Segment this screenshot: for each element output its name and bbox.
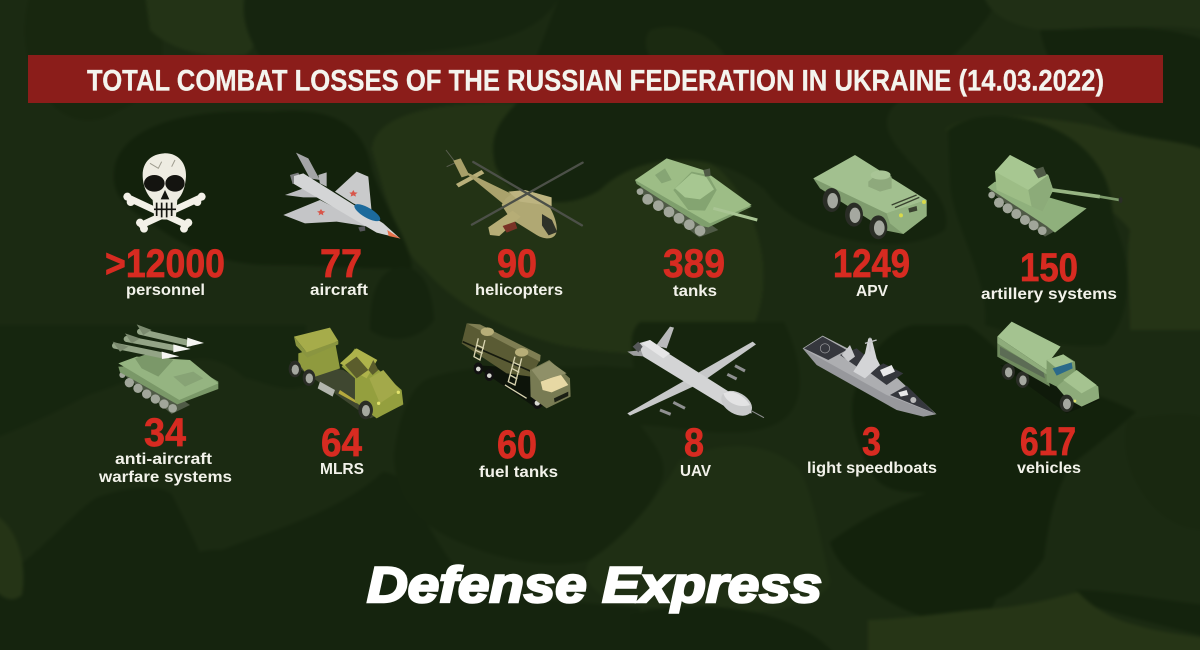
icon: fuel tanker truck	[462, 323, 572, 409]
item: MLRS	[289, 328, 403, 478]
icon: self-propelled howitzer	[988, 155, 1123, 237]
title banner	[28, 55, 1163, 103]
value: 34: 34	[144, 411, 187, 455]
item: light speedboats	[803, 336, 937, 477]
value: 389: 389	[663, 242, 725, 286]
label: anti-aircraft warfare systems	[98, 451, 232, 486]
label: light speedboats: light speedboats	[807, 460, 937, 477]
item: UAV	[627, 327, 764, 480]
icon: drone	[627, 327, 764, 421]
icon: helicopter	[446, 150, 583, 238]
label: fuel tanks: fuel tanks	[479, 464, 558, 481]
label: personnel: personnel	[126, 282, 205, 299]
icon: skull and crossbones	[123, 153, 206, 233]
label: anti-aircraft warfare systems: anti-aircraft	[115, 451, 213, 468]
label: anti-aircraft warfare systems: warfare systems	[98, 469, 232, 486]
label: aircraft: aircraft	[310, 282, 369, 299]
value: 90: 90	[497, 242, 537, 286]
value: 8: 8	[684, 421, 704, 465]
item: artillery systems	[981, 155, 1123, 303]
icon: rocket launcher truck	[289, 328, 403, 419]
item: APV	[813, 155, 927, 300]
item: anti-aircraft warfare systems	[98, 324, 232, 486]
logo: Defense Express: Defense Express	[367, 557, 822, 613]
item: tanks	[635, 158, 757, 300]
item: fuel tanks	[462, 323, 572, 481]
label: helicopters: helicopters	[475, 282, 563, 299]
value: 617: 617	[1020, 420, 1076, 464]
value: 1249: 1249	[833, 242, 910, 286]
icon: fighter jet	[283, 153, 401, 239]
icon: tank	[635, 158, 757, 237]
value: 3: 3	[862, 420, 881, 464]
icon: surface-to-air missile launcher	[113, 324, 218, 414]
label: vehicles: vehicles	[1017, 460, 1081, 477]
item: vehicles	[997, 322, 1100, 477]
value: 150: 150	[1020, 246, 1078, 290]
label: tanks: tanks	[673, 283, 717, 300]
item: aircraft	[283, 153, 401, 299]
label: MLRS: MLRS	[320, 461, 364, 478]
label: artillery systems: artillery systems	[981, 286, 1117, 303]
icon: armoured personnel vehicle	[813, 155, 927, 239]
value: 77: 77	[320, 242, 362, 286]
label: UAV: UAV	[680, 463, 711, 480]
icon: military truck	[997, 322, 1100, 413]
value: 60: 60	[497, 423, 537, 467]
icon: patrol boat	[803, 336, 937, 417]
item: helicopters	[446, 150, 583, 299]
label: APV: APV	[856, 283, 888, 300]
value: >12000: >12000	[105, 242, 225, 286]
value: 64: 64	[321, 421, 363, 465]
item: personnel	[105, 153, 225, 299]
